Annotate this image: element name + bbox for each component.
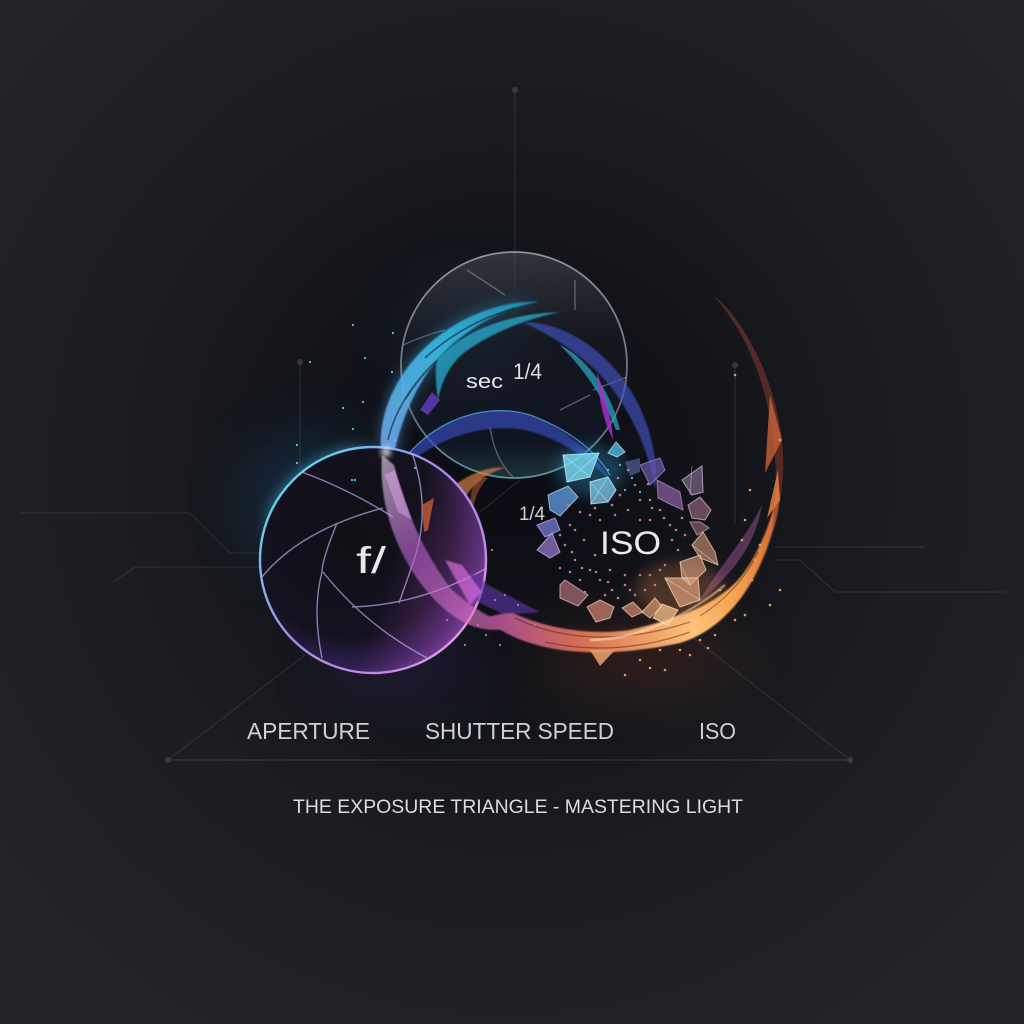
background circuit lines and triangle <box>20 90 1005 760</box>
crystal facet lines <box>563 453 718 600</box>
pink swoosh arc <box>381 447 540 630</box>
aperture circle <box>260 447 487 673</box>
particles <box>297 325 780 675</box>
orange swoosh arc <box>485 295 783 666</box>
label: ISO: ISO <box>699 718 736 744</box>
blue swoosh arc <box>381 301 656 490</box>
inner arc band <box>392 411 610 530</box>
shutter blade lines <box>403 270 627 477</box>
aperture blade lines <box>261 453 487 658</box>
label: sec: sec <box>466 371 503 393</box>
label: ISO centre: ISO <box>600 525 661 561</box>
label: f/: f/ <box>356 540 387 581</box>
ISO crystals <box>537 442 725 625</box>
label: 1/4 upper: 1/4 <box>513 359 542 384</box>
label: 1/4 lower: 1/4 <box>519 504 545 525</box>
ambient glows <box>250 290 740 687</box>
title: THE EXPOSURE TRIANGLE - MASTERING LIGHT <box>293 797 743 818</box>
shutter speed circle <box>401 252 627 478</box>
label: aperture: APERTURE <box>247 718 370 744</box>
label: shutter speed: SHUTTER SPEED <box>425 718 614 744</box>
